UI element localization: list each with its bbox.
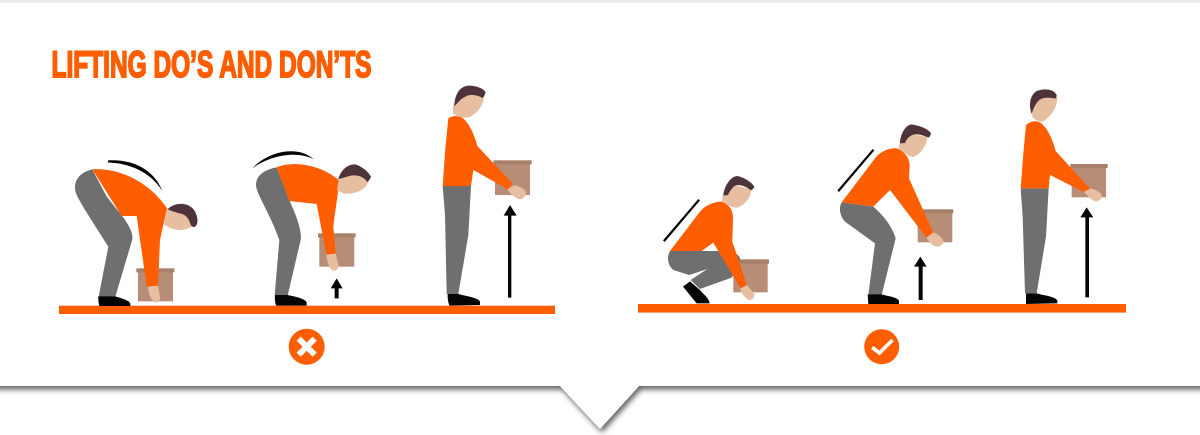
shoe bbox=[275, 295, 307, 306]
figure: squatting with straight back bbox=[663, 176, 769, 303]
hand bbox=[740, 285, 755, 300]
shoe bbox=[98, 296, 130, 306]
legs bbox=[1021, 188, 1049, 293]
shoe bbox=[448, 294, 480, 306]
figure: half-lift with straight back bbox=[837, 124, 953, 304]
hair bbox=[454, 86, 486, 106]
box bbox=[136, 268, 174, 301]
torso and arm bbox=[842, 148, 934, 238]
face bbox=[453, 93, 484, 118]
icon: check mark bbox=[864, 329, 899, 364]
shoe bbox=[683, 281, 710, 303]
hand bbox=[148, 286, 160, 302]
hair bbox=[168, 204, 197, 227]
torso and arm bbox=[92, 169, 167, 287]
back line bbox=[837, 149, 874, 192]
hair bbox=[1030, 89, 1057, 114]
box bbox=[917, 209, 953, 242]
hand bbox=[326, 254, 339, 271]
figure: rounded back, box lifted slightly bbox=[252, 151, 371, 306]
torso and arm bbox=[277, 164, 339, 254]
hair bbox=[338, 164, 371, 182]
face bbox=[164, 209, 192, 230]
ground line: do's bbox=[638, 304, 1126, 313]
hand bbox=[1084, 188, 1102, 201]
legs bbox=[256, 167, 301, 296]
face bbox=[1031, 97, 1057, 121]
hair bbox=[900, 124, 931, 143]
arrow bbox=[504, 205, 517, 298]
torso and arm bbox=[1021, 121, 1090, 193]
back curve bbox=[108, 160, 162, 191]
hand bbox=[507, 185, 526, 199]
icon: cross bbox=[289, 329, 325, 365]
face bbox=[337, 173, 369, 194]
arrow bbox=[1080, 207, 1093, 297]
legs bbox=[75, 169, 132, 297]
figure: standing upright with box bbox=[1021, 89, 1108, 304]
shoe bbox=[1026, 293, 1057, 304]
figure: standing, box lifted high bbox=[443, 86, 532, 306]
torso and arm bbox=[443, 116, 512, 190]
box bbox=[1070, 164, 1108, 197]
face bbox=[898, 134, 927, 157]
box bbox=[493, 160, 532, 195]
shoe bbox=[868, 294, 899, 304]
face bbox=[722, 184, 751, 208]
arrow bbox=[331, 278, 343, 298]
back curve bbox=[252, 151, 314, 168]
figure: bent back, box on floor bbox=[75, 160, 197, 306]
back line bbox=[663, 199, 700, 242]
arrow bbox=[914, 257, 927, 300]
hair bbox=[723, 176, 754, 196]
title: LIFTING DO’S AND DON’TS bbox=[52, 44, 372, 85]
box bbox=[318, 233, 356, 267]
legs bbox=[668, 251, 740, 289]
box bbox=[733, 259, 769, 292]
hand bbox=[926, 232, 944, 247]
ground line: don'ts bbox=[59, 306, 555, 314]
legs bbox=[840, 202, 896, 295]
torso and arm bbox=[670, 202, 747, 289]
legs bbox=[443, 186, 471, 294]
